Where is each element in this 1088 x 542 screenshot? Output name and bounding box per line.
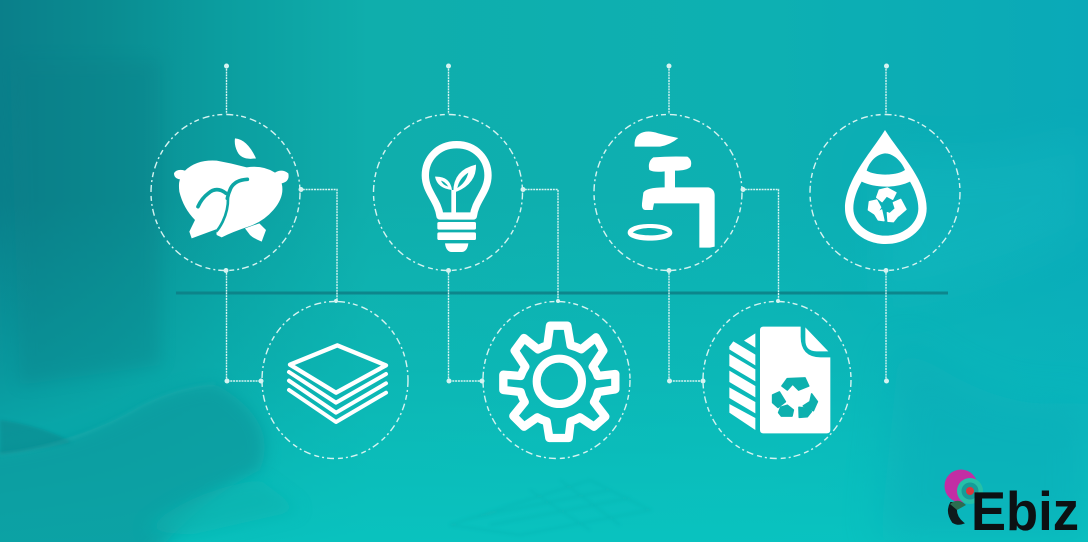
icon: water tap xyxy=(628,131,715,248)
icon: sack with leaf xyxy=(174,138,289,242)
icon: stacked layers xyxy=(289,345,386,422)
icon: recycled paper document xyxy=(729,327,830,433)
connector dots xyxy=(224,64,889,384)
logo wordmark: Ebiz xyxy=(971,481,1079,542)
icon: light bulb with sprout xyxy=(425,145,488,252)
connectors xyxy=(226,66,886,381)
icon: gear xyxy=(503,326,615,438)
icon: water drop with recycling symbol xyxy=(845,130,927,244)
logo mark xyxy=(944,470,983,524)
logo: Ebiz xyxy=(944,470,1079,542)
divider line xyxy=(176,292,948,294)
dashed circles xyxy=(151,114,960,458)
